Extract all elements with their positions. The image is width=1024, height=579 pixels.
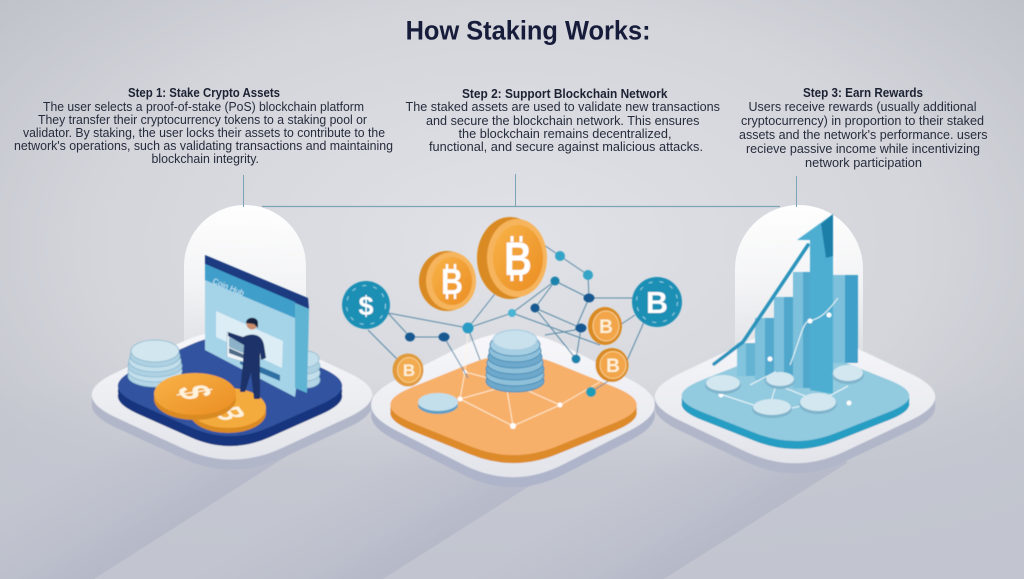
text block: step 3: cryptocurrency) in proportion to their staked	[741, 113, 984, 128]
gold coins: $	[166, 382, 223, 402]
dollar token	[342, 281, 390, 329]
text block: step 2: the blockchain remains decentralized,	[458, 126, 672, 141]
text block: step 1: blockchain integrity.	[152, 151, 259, 166]
small bitcoin left: B	[403, 361, 415, 380]
text block: step 1	[14, 86, 393, 166]
small bitcoin right lower: B	[606, 356, 620, 377]
small bitcoin right upper: B	[599, 317, 613, 338]
text block: step 1: They transfer their cryptocurrency tokens to a staking pool or	[38, 112, 368, 127]
coin stack left	[128, 340, 182, 387]
small bitcoin left	[392, 354, 424, 386]
base plate 3	[655, 331, 935, 473]
small bitcoin right lower	[596, 348, 628, 382]
text block: step 1: network's operations, such as validating transactions and maintaining	[14, 138, 393, 153]
bitcoin token: B	[646, 285, 668, 320]
text block: step 2: and secure the blockchain network. This ensures	[426, 113, 700, 128]
text block: step 3: network participation	[805, 155, 922, 170]
text block: step 3: Step 3: Earn Rewards	[803, 86, 923, 100]
text block: step 2: functional, and secure against malicious attacks.	[429, 139, 703, 154]
gold coins	[154, 373, 266, 433]
blue platform	[118, 336, 342, 446]
connector lines	[244, 174, 796, 207]
staking window	[205, 255, 309, 397]
network lines on platform	[460, 328, 600, 426]
domes	[184, 205, 863, 350]
base plate 1	[92, 330, 372, 470]
large bitcoin: B	[504, 232, 532, 285]
dollar token: $	[358, 291, 374, 321]
platform nodes	[458, 370, 562, 429]
network nodes	[405, 251, 596, 397]
text block: step 3: Users receive rewards (usually additional	[748, 99, 977, 114]
text block: step 3: recieve passive income while incentivizing	[746, 141, 980, 156]
panel: earn rewards	[655, 214, 935, 473]
medium bitcoin	[419, 251, 476, 311]
text block: step 2	[406, 87, 720, 154]
flat coin	[418, 393, 458, 414]
panel: stake crypto assets	[92, 255, 372, 470]
gold coins: B	[203, 404, 255, 423]
text block: step 3	[739, 86, 988, 170]
teal platform	[682, 351, 909, 449]
medium bitcoin: B	[441, 261, 463, 302]
staked coins	[705, 365, 864, 418]
large bitcoin	[477, 217, 547, 299]
chart nodes	[718, 312, 852, 406]
trend line	[723, 298, 848, 412]
base plate 2	[371, 333, 655, 487]
network edges	[368, 245, 644, 392]
text block: step 1: validator. By staking, the user locks their assets to contribute to the	[23, 125, 385, 140]
text block: step 1: Step 1: Stake Crypto Assets	[128, 86, 280, 100]
growth arrow	[714, 214, 833, 394]
bitcoin token	[632, 277, 682, 327]
small bitcoin right upper	[588, 307, 622, 345]
text block: step 2: Step 2: Support Blockchain Network	[462, 87, 668, 101]
orange platform	[390, 355, 637, 463]
panel: support blockchain network	[342, 217, 682, 487]
person with document	[227, 318, 266, 399]
text block: step 1: The user selects a proof-of-stake (PoS) blockchain platform	[43, 99, 364, 114]
coin stack right	[292, 351, 320, 388]
central coin stack	[486, 330, 544, 392]
text block: step 3: assets and the network's performance. users	[739, 127, 988, 142]
text block: step 2: The staked assets are used to validate new transactions	[406, 99, 720, 114]
title: How Staking Works:	[406, 16, 651, 46]
staking window: Coin Hub	[211, 277, 246, 298]
bar chart	[737, 272, 858, 388]
